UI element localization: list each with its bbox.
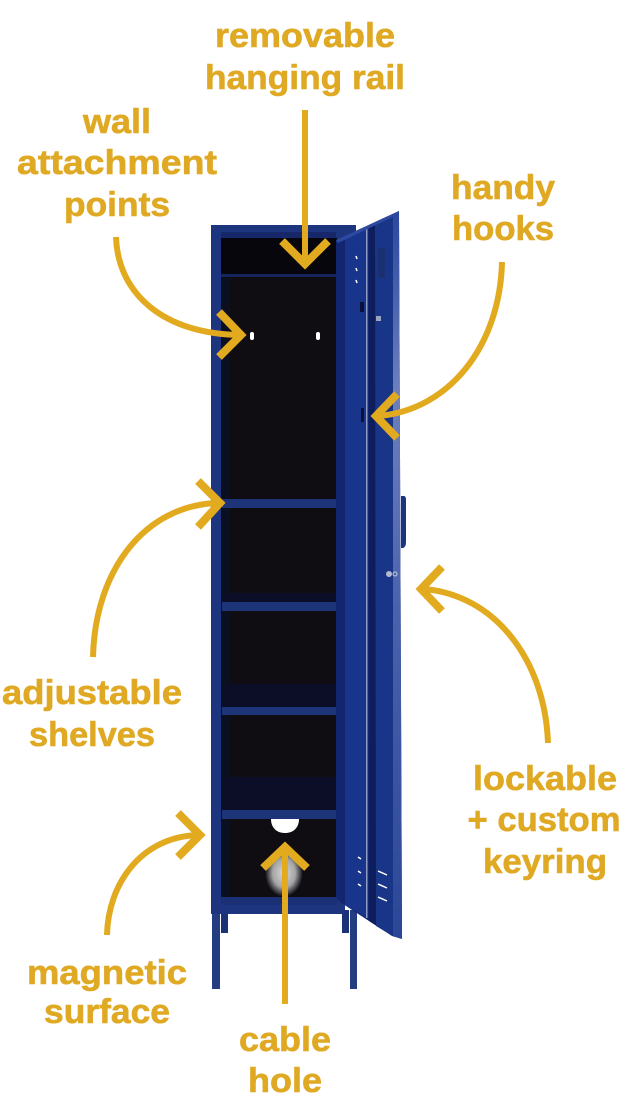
- label: adjustable shelves: shelves: [29, 716, 155, 754]
- front legs: [212, 910, 357, 989]
- label: adjustable shelves: [2, 674, 182, 754]
- shelf shadows: [222, 593, 336, 810]
- label: wall attachment points: attachment: [17, 144, 217, 182]
- label: wall attachment points: [17, 103, 217, 224]
- label: lockable + custom keyring: keyring: [483, 843, 607, 881]
- door handle: [401, 496, 406, 548]
- arrow: magnetic: [107, 813, 200, 935]
- cabinet interior: [221, 238, 337, 898]
- arrow: hooks: [376, 262, 502, 438]
- label: removable hanging rail: removable: [215, 17, 395, 55]
- arrow: cable hole: [263, 847, 307, 1004]
- locker: [211, 211, 406, 989]
- door vents: [356, 256, 387, 901]
- back legs: [221, 910, 349, 933]
- label: handy hooks: hooks: [452, 210, 554, 248]
- cabinet frame: [211, 225, 356, 914]
- label: magnetic surface: magnetic: [27, 954, 187, 992]
- arrow: lock: [421, 567, 548, 743]
- label: wall attachment points: wall: [82, 103, 151, 141]
- cabinet floor: [221, 897, 337, 905]
- arrow: hanging rail: [282, 110, 328, 264]
- label: lockable + custom keyring: lockable: [473, 760, 617, 798]
- lock: [386, 571, 392, 577]
- door slots: [360, 248, 385, 422]
- label: removable hanging rail: hanging rail: [205, 59, 405, 97]
- label: cable hole: hole: [248, 1062, 322, 1100]
- label: magnetic surface: [27, 954, 187, 1031]
- label: cable hole: cable: [239, 1021, 331, 1059]
- shelves: [222, 499, 336, 819]
- label: lockable + custom keyring: [468, 760, 620, 881]
- label: handy hooks: handy: [451, 169, 555, 207]
- arrow: wall attachment: [116, 237, 241, 357]
- label: magnetic surface: surface: [44, 993, 170, 1031]
- label: cable hole: [239, 1021, 331, 1100]
- label: handy hooks: [451, 169, 555, 248]
- label: removable hanging rail: [205, 17, 405, 97]
- label: adjustable shelves: adjustable: [2, 674, 182, 712]
- arrow: shelves: [93, 481, 220, 657]
- light glow: [265, 849, 303, 897]
- door: [336, 211, 406, 939]
- label: lockable + custom keyring: + custom: [468, 801, 620, 839]
- hanging rail: [221, 274, 336, 277]
- label: wall attachment points: points: [64, 186, 170, 224]
- keyhole slots: [250, 332, 320, 340]
- cable hole: [271, 819, 299, 833]
